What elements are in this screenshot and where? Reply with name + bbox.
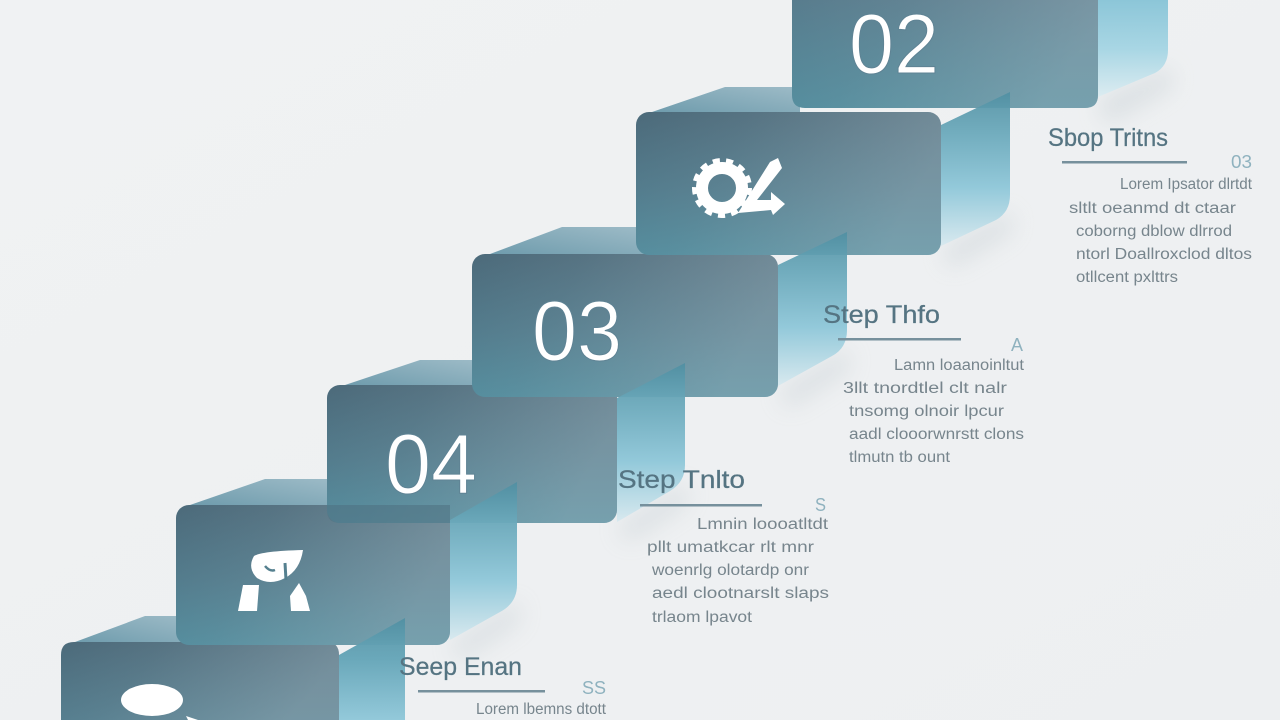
block 6: bottom, ellipse icon (61, 616, 339, 720)
marker: SS (582, 678, 606, 698)
block 1: 02 (792, 0, 1098, 108)
text block: step bottom (399, 653, 607, 718)
marker: 03 (1231, 152, 1252, 172)
body text: Lorem Ipsator dlrtdt (1120, 176, 1253, 193)
body text: Lamn loaanoinltut (894, 357, 1025, 374)
text block: step middle: 3llt tnordtlel clt nalr (843, 380, 1007, 397)
icon: ellipse (121, 684, 198, 720)
text block: step lower: aedl clootnarslt slaps (652, 585, 829, 602)
block 2: gear icon (636, 87, 941, 255)
body text: Lmnin loooatltdt (697, 516, 829, 533)
side faces (339, 0, 1168, 720)
icon: gear and arrow (695, 158, 785, 215)
title: Step Thfo (823, 301, 940, 329)
title: Sbop Tritns (1048, 124, 1168, 152)
soft shadows under blocks (450, 66, 1172, 660)
text block: step lower: woenrlg olotardp onr (651, 562, 809, 579)
number 04: 04 (385, 417, 477, 511)
text block: step middle: aadl clooorwnrstt clons (849, 426, 1024, 443)
marker: S (815, 495, 826, 515)
block 3: 03 (472, 227, 778, 397)
text block: step top right (1048, 124, 1253, 286)
title: Seep Enan (399, 653, 522, 681)
text block: step middle: tnsomg olnoir lpcur (849, 403, 1004, 420)
block 5: person icon (176, 479, 450, 645)
body text: Lorem lbemns dtott (476, 701, 607, 718)
text block: step top right: ntorl Doallroxclod dltos (1076, 246, 1252, 263)
text block: step top right: sltlt oeanmd dt ctaar (1069, 200, 1236, 217)
text block: step lower (618, 466, 829, 626)
number 03: 03 (532, 284, 622, 378)
text block: step top right: otllcent pxlttrs (1076, 269, 1178, 286)
text block: step middle (823, 301, 1025, 466)
icon: person shape (238, 550, 310, 611)
text block: step lower: pllt umatkcar rlt mnr (647, 539, 814, 556)
title: Step Tnlto (618, 466, 745, 494)
text block: step lower: trlaom lpavot (652, 609, 753, 626)
block 4: 04 (327, 360, 617, 523)
text block: step middle: tlmutn tb ount (849, 449, 951, 466)
text block: step top right: coborng dblow dlrrod (1076, 223, 1232, 240)
marker: A (1011, 335, 1023, 355)
